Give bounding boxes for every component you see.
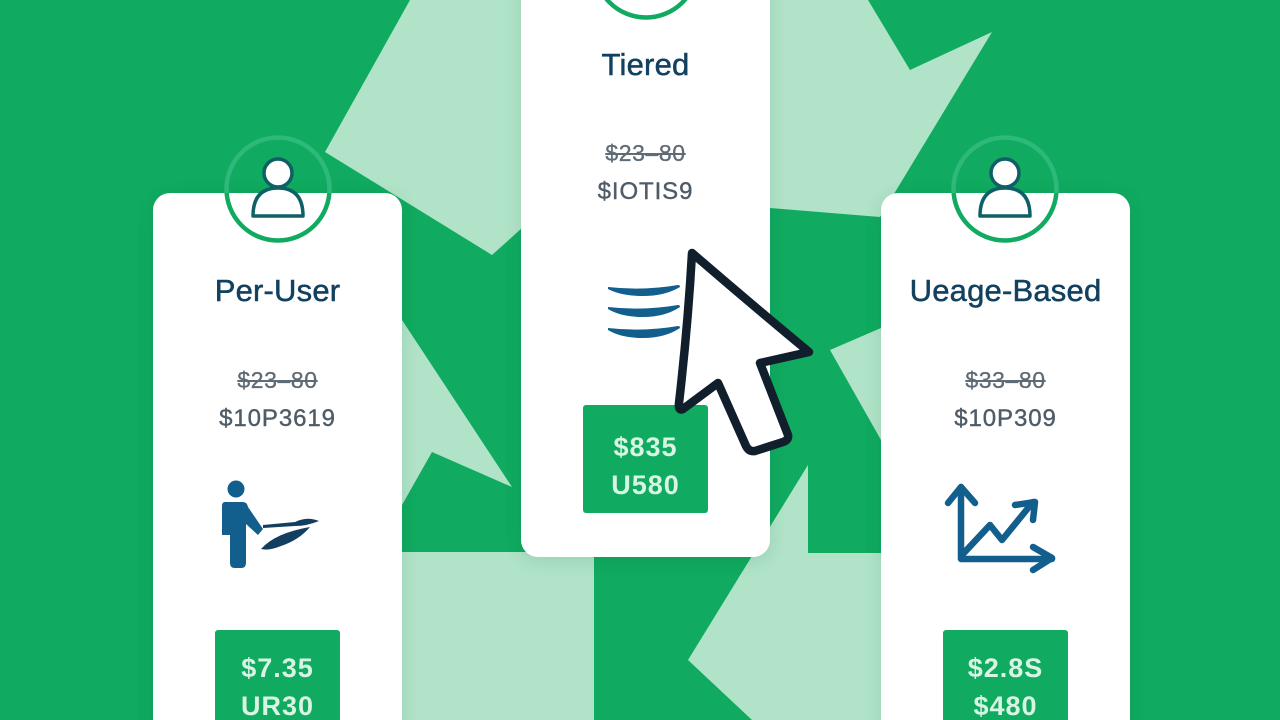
price range: $23–80 [605, 140, 686, 166]
panel: Tiered card [521, 0, 770, 557]
panel: Per-User card [153, 193, 402, 720]
price box [943, 630, 1068, 720]
icon: mouse cursor arrow [674, 248, 814, 456]
price box [215, 630, 340, 720]
price detail: $IOTIS9 [598, 178, 693, 205]
price detail: $10P3619 [219, 405, 336, 432]
panel: Usage-Based card [881, 193, 1130, 720]
price detail: $10P309 [954, 405, 1057, 432]
price box: $2.8S [968, 653, 1043, 683]
price box: $835 [613, 432, 678, 462]
icon: Per-User avatar [224, 135, 332, 243]
price box: $7.35 [241, 653, 314, 683]
icon: person with pen [222, 480, 319, 568]
icon: Tiered avatar [604, 0, 688, 20]
price box [583, 405, 708, 513]
heading: Tiered: Tiered [602, 47, 689, 82]
heading: Ueage-Based: Ueage-Based [910, 273, 1101, 308]
icon: tier layers [608, 285, 680, 338]
icon: growth chart [944, 484, 1056, 574]
price range: $33–80 [965, 367, 1046, 393]
price range: $23–80 [237, 367, 318, 393]
heading: Per-User: Per-User [215, 273, 340, 308]
price box: U580 [611, 470, 680, 500]
icon: Usage-Based avatar [951, 135, 1059, 243]
